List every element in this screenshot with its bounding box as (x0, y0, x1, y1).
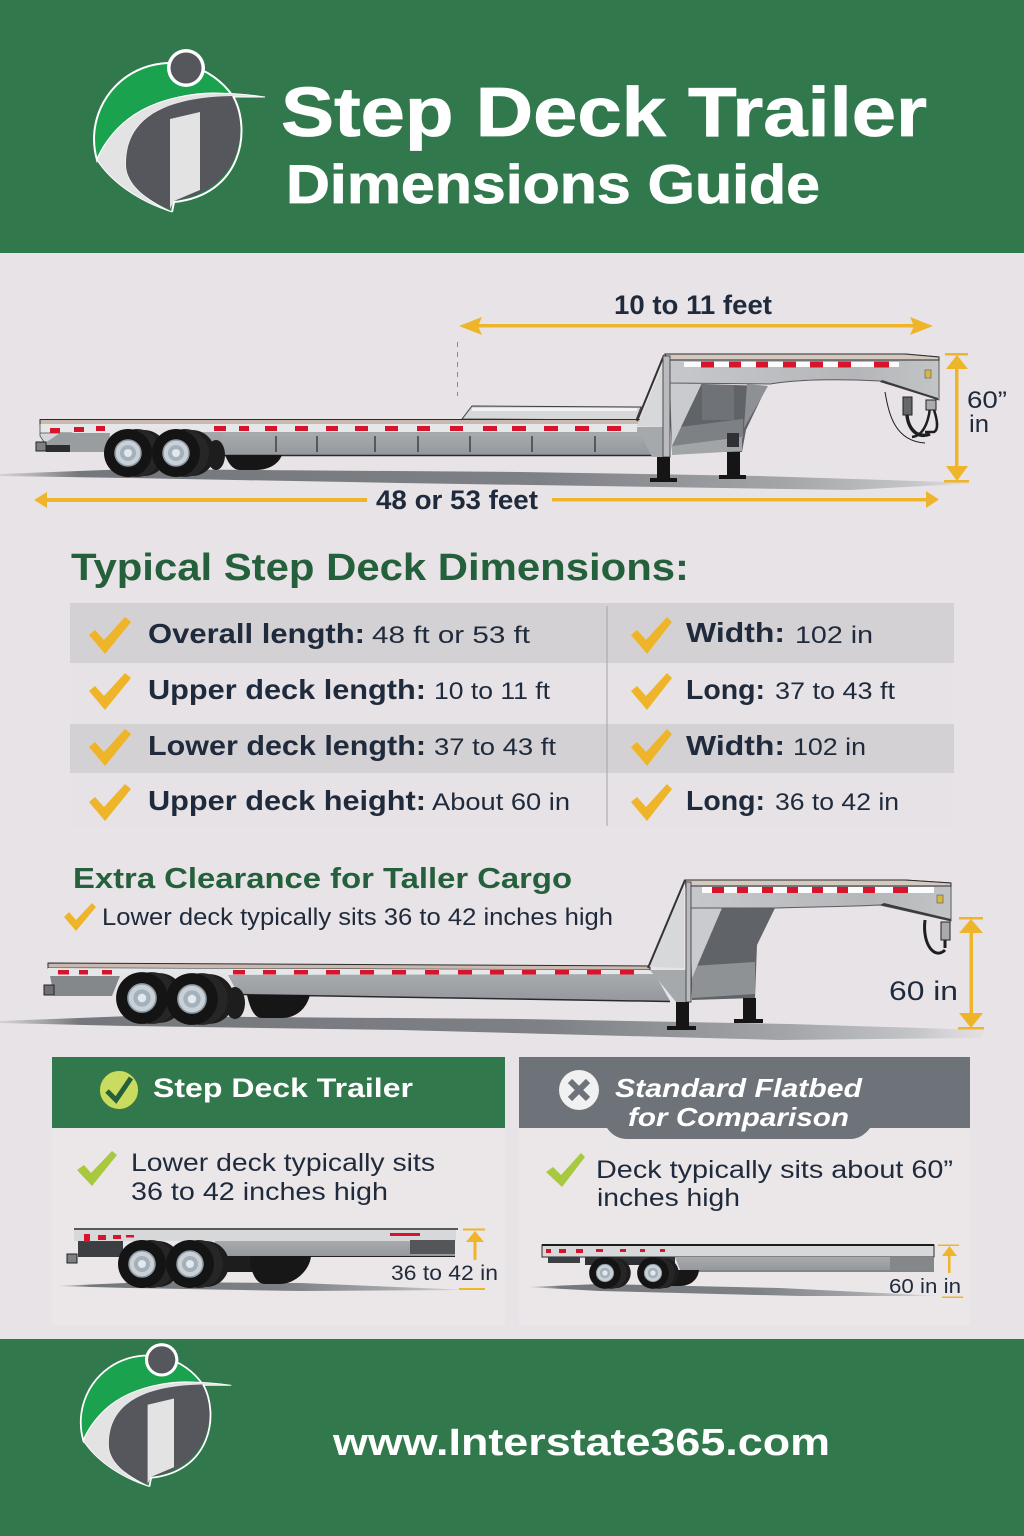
website url: www.Interstate365.com (332, 1422, 830, 1464)
ground shadow (527, 1284, 940, 1296)
row: long upper: Long: (686, 674, 765, 705)
row: width lower (686, 730, 866, 761)
panel text: 36 to 42 inches high (131, 1178, 388, 1206)
title: Dimensions Guide (286, 153, 820, 215)
row: width upper: Width: (686, 617, 785, 648)
text: lower deck height: Lower deck typically sits 36 to 42 inches high (102, 904, 613, 931)
row: overall length: 48 ft or 53 ft (372, 622, 530, 649)
panel: step deck trailer (52, 1057, 505, 1325)
panel title (615, 1073, 863, 1132)
row: lower deck length (148, 730, 556, 761)
title: Step Deck Trailer (281, 73, 927, 151)
panel title: Step Deck Trailer (153, 1073, 414, 1103)
arrow: 60 in (938, 1244, 963, 1298)
row: upper deck length: 10 to 11 ft (434, 678, 550, 705)
panel header: step deck (52, 1057, 505, 1128)
icon: check (546, 1153, 585, 1187)
row: upper deck height (148, 785, 570, 816)
icon: check (64, 903, 96, 931)
row: width lower: Width: (686, 730, 785, 761)
row: upper deck height: About 60 in (432, 789, 570, 816)
ground shadow (0, 469, 980, 490)
row: upper deck length (148, 674, 550, 705)
row: overall length: Overall length: (148, 618, 365, 649)
row: lower deck length: Lower deck length: (148, 730, 426, 761)
label: 60 in: 60 in (889, 976, 958, 1006)
label: 36 to 42 in: 36 to 42 in (391, 1262, 498, 1285)
heading: extra clearance: Extra Clearance for Taller Cargo (73, 863, 572, 895)
heading: typical dimensions: Typical Step Deck Dimensions: (71, 547, 689, 589)
header band (0, 0, 1024, 253)
title (281, 73, 927, 215)
row: width upper: 102 in (795, 622, 873, 649)
row: upper deck height: Upper deck height: (148, 785, 426, 816)
section: extra clearance (0, 863, 985, 1040)
main trailer diagram with dimensions (0, 290, 1007, 515)
panel header: flatbed (519, 1057, 970, 1139)
label: upper deck dimension: 10 to 11 feet (614, 290, 772, 320)
arrow: overall length (34, 491, 939, 508)
row: lower deck length: 37 to 43 ft (434, 734, 556, 761)
label: 60 in in: 60 in in (889, 1276, 961, 1298)
footer band (0, 1339, 1024, 1536)
ground shadow (0, 1016, 985, 1040)
label: 60 in height (967, 387, 1007, 438)
row: width lower: 102 in (793, 734, 866, 761)
trailer illustration: second side view (44, 880, 951, 1030)
dimensions table (70, 603, 954, 828)
label: 60 in height: in (969, 411, 989, 438)
icon: check (77, 1151, 117, 1186)
panel text (596, 1156, 953, 1212)
arrow: 60 in (958, 917, 984, 1030)
panel title: for Comparison (628, 1102, 849, 1132)
row: long lower: Long: (686, 785, 765, 816)
row: upper deck length: Upper deck length: (148, 674, 426, 705)
icon: x badge (559, 1070, 599, 1110)
arrow: 60 in height (944, 353, 969, 482)
ground shadow (56, 1282, 470, 1291)
icons: row checks (89, 617, 672, 821)
panel text: inches high (597, 1184, 740, 1212)
panel: standard flatbed (519, 1057, 970, 1325)
trailer illustration: step deck small (67, 1229, 458, 1288)
arrow: upper deck length (459, 317, 933, 335)
icon: footer logo (81, 1343, 231, 1487)
row: overall length (148, 618, 530, 649)
icon: green check badge (100, 1070, 138, 1110)
label: overall length: 48 or 53 feet (376, 485, 538, 515)
row: long lower: 36 to 42 in (775, 789, 899, 816)
row: long upper (686, 674, 895, 705)
trailer illustration: gooseneck step deck (36, 354, 939, 482)
trailer illustration: flatbed small (542, 1245, 934, 1289)
panel text: Lower deck typically sits (131, 1149, 435, 1177)
label: 60 in height: 60” (967, 387, 1007, 414)
row: long lower (686, 785, 899, 816)
panel text: Deck typically sits about 60” (596, 1156, 953, 1184)
icon: header logo (94, 49, 265, 212)
row: long upper: 37 to 43 ft (775, 678, 895, 705)
row: width upper (686, 617, 873, 649)
panel text (131, 1149, 435, 1206)
panel title: Standard Flatbed (615, 1073, 863, 1103)
arrow: 36 to 42 (459, 1228, 485, 1290)
